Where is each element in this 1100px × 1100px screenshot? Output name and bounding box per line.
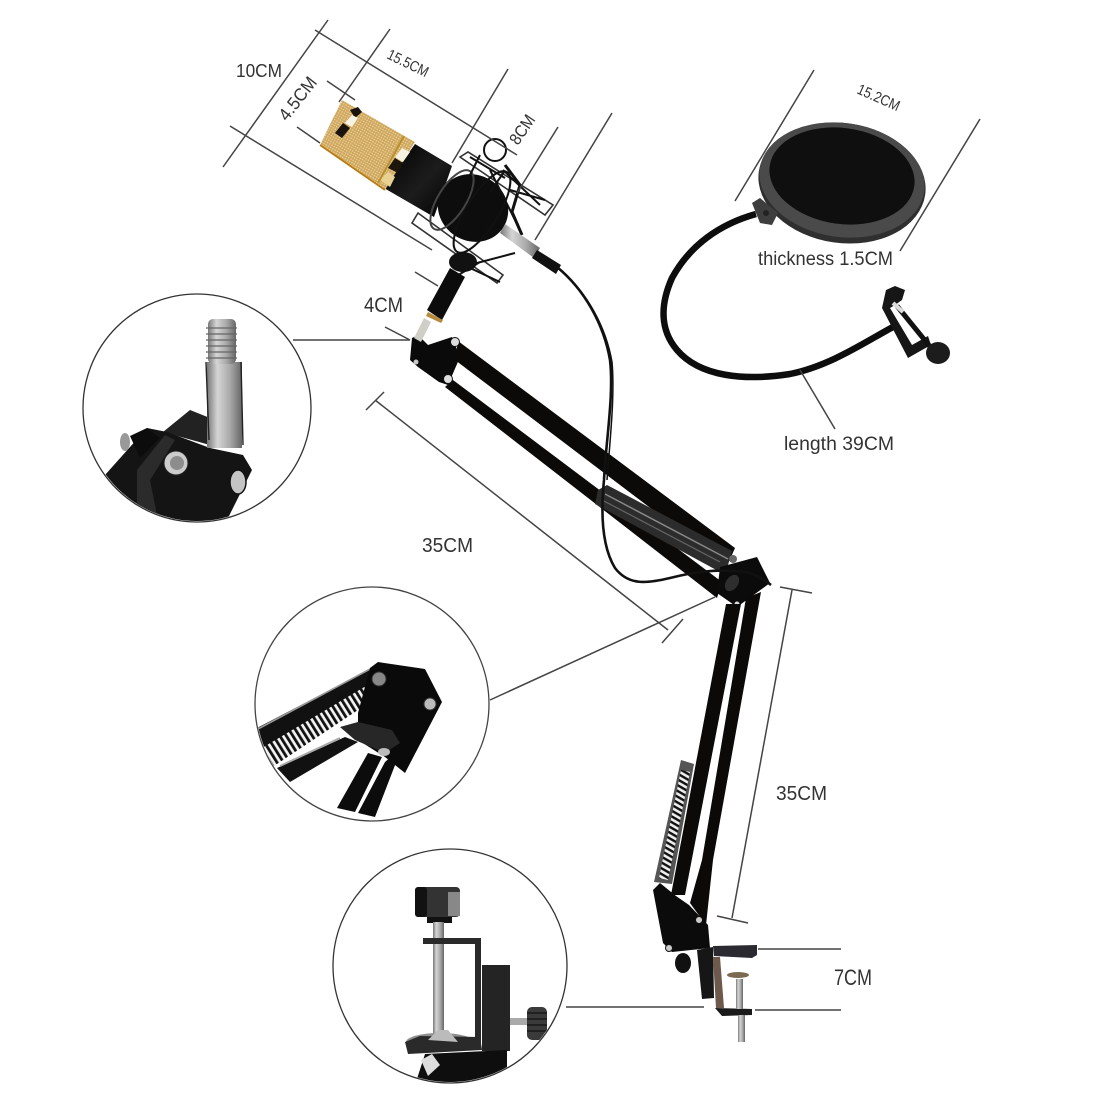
gooseneck clamp bbox=[882, 286, 950, 364]
top joint plate bbox=[410, 335, 460, 385]
base joint plate bbox=[653, 883, 710, 952]
detail circle: desk clamp bbox=[333, 849, 567, 1085]
label: 4CM: 4CM bbox=[364, 294, 403, 317]
label: length: length 39CM bbox=[784, 434, 894, 455]
label: 7CM: 7CM bbox=[834, 965, 872, 990]
label: 10CM: 10CM bbox=[236, 61, 282, 81]
arm spring bbox=[595, 485, 732, 572]
shock mount rings and elastics bbox=[422, 139, 545, 282]
desk clamp bbox=[675, 945, 757, 1042]
microphone bbox=[320, 100, 771, 585]
boom arm bbox=[410, 335, 770, 1042]
filter disc bbox=[750, 112, 934, 254]
label: thickness: thickness 1.5CM bbox=[758, 249, 893, 270]
label: 15.2CM: 15.2CM bbox=[854, 81, 902, 115]
lower arm spring bbox=[654, 760, 694, 884]
gold mesh head bbox=[320, 100, 415, 190]
label: 8CM: 8CM bbox=[506, 111, 539, 148]
XLR connector and plug bbox=[500, 224, 561, 274]
label: 15.5CM: 15.5CM bbox=[384, 46, 431, 81]
pop filter bbox=[664, 112, 950, 377]
detail circle: threaded bolt bbox=[83, 294, 311, 530]
microphone body bbox=[384, 144, 452, 217]
label: 35CM horizontal arm: 35CM bbox=[422, 535, 473, 557]
label: 4.5CM: 4.5CM bbox=[274, 73, 321, 124]
dimension lines bbox=[223, 20, 980, 1010]
label: 35CM vertical arm: 35CM bbox=[776, 783, 827, 805]
infographic: microphone kit with dimensions bbox=[82, 20, 981, 1084]
upper arm rails bbox=[445, 341, 735, 598]
detail circle: arm joint bbox=[255, 587, 489, 821]
microphone cable bbox=[557, 267, 771, 585]
lower arm rails bbox=[671, 592, 761, 925]
shock mount frames bbox=[412, 152, 553, 283]
elbow joint plate bbox=[717, 557, 770, 607]
mount adapter and post bbox=[414, 252, 477, 342]
gooseneck bbox=[664, 214, 893, 377]
